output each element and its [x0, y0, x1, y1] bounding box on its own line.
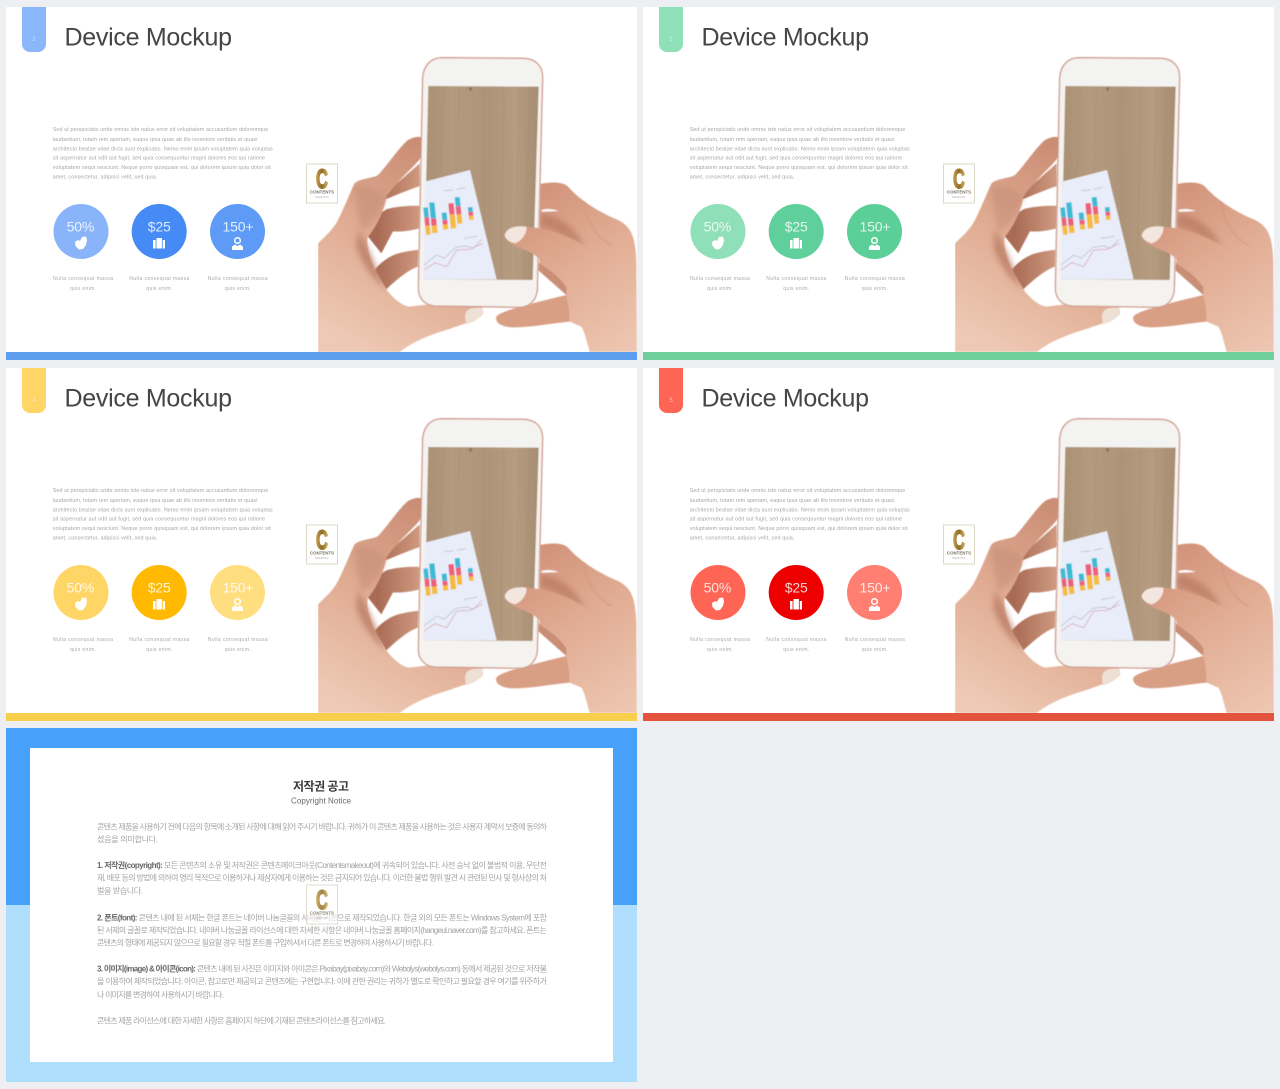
copyright white card [30, 748, 613, 1062]
slide 4 body text: sit aspernatur aut odit aut fugit, sed quia consequuntur magni dolores eos qui ratione [53, 517, 265, 523]
slide 5 stat: $25 [769, 565, 824, 620]
copyright clause 3: 나 이미지를 변경하여 사용하시기 바랍니다. [97, 989, 224, 999]
slide 4 logo stamp: CONTENTS [310, 550, 334, 556]
slide 5 stat: 150+: 150+ [860, 580, 890, 596]
slide 5 stat: 150+ [847, 565, 902, 620]
slide 4 logo stamp: C [316, 525, 328, 555]
slide 3 title: Device Mockup [702, 24, 869, 52]
slide 2 number tab [22, 7, 46, 52]
slide 4 stat captions: Nulla consequat massa [129, 637, 189, 643]
slide 2 bottom bar [6, 352, 637, 360]
slide 2 logo stamp: C [316, 164, 328, 194]
slide 2 body text [53, 127, 273, 181]
slide 5 stat captions: quis enim. [783, 647, 809, 653]
slide 5: red device mockup [643, 368, 1274, 721]
slide 2 stat captions: quis enim. [225, 286, 251, 292]
slide 2: blue device mockup [6, 7, 637, 360]
slide 5 number tab [659, 368, 683, 413]
slide 2 stat captions: Nulla consequat massa [208, 276, 268, 282]
slide 4 stat captions: quis enim. [70, 647, 96, 653]
copyright clause 2 [97, 912, 548, 948]
copyright logo stamp: MAKE OUT [315, 916, 329, 920]
copyright closing line: 콘텐츠 제품 라이선스에 대한 자세한 사항은 홈페이지 하단에 기재된 콘텐츠라이선스를 참고하세요. [97, 1016, 386, 1026]
copyright clause 1 [97, 860, 547, 896]
slide 4 body text: laudantium, totam rem aperiam, eaque ipsa quae ab illo inventore veritatis et quasi [53, 498, 257, 504]
slide 5 body text [690, 488, 910, 542]
slide 2 number tab: 2 [32, 37, 36, 43]
slide 4 body text: voluptatem sequi nesciunt. Neque porro quisquam est, qui dolorem ipsum quia dolor sit [53, 526, 271, 532]
slide 2 stat: $25 [132, 204, 187, 259]
copyright frame: lower light blue band [6, 905, 637, 1082]
slide 5 body text: Sed ut perspiciatis unde omnis iste natus error sit voluptatem accusantium doloremque [690, 488, 905, 494]
slide 2 body text: laudantium, totam rem aperiam, eaque ipsa quae ab illo inventore veritatis et quasi [53, 137, 257, 143]
slide 3 photo: hands holding phone [955, 58, 1274, 352]
copyright frame: upper blue band [6, 728, 637, 905]
slide 4 logo stamp [306, 525, 338, 564]
slide 2 photo: hands holding phone [318, 58, 637, 352]
copyright clause 1: 1. 저작권(copyright): 모든 콘텐츠의 소유 및 저작권은 콘텐츠메이크아웃(Contentsmakeout)에 귀속되어 있습니다. 사전 승낙 없이 불법적 이용, 무단전 [97, 860, 547, 870]
slide 3 logo stamp: C [953, 164, 965, 194]
slide 5 stat: 50%: 50% [704, 580, 731, 596]
copyright notice slide [6, 728, 637, 1082]
slide 5 stat captions: Nulla consequat massa [690, 637, 750, 643]
slide 5 stat captions: quis enim. [862, 647, 888, 653]
slide 4 bottom bar [6, 713, 637, 721]
copyright heading: 저작권 공고 [293, 778, 349, 794]
copyright intro text [97, 822, 548, 844]
slide 5 bottom bar [643, 713, 1274, 721]
slide 2 stat captions: quis enim. [70, 286, 96, 292]
copyright logo stamp: CONTENTS [310, 910, 334, 916]
slide 5 body text: sit aspernatur aut odit aut fugit, sed quia consequuntur magni dolores eos qui ratione [690, 517, 902, 523]
slide 2 body text: Sed ut perspiciatis unde omnis iste natus error sit voluptatem accusantium doloremque [53, 127, 268, 133]
slide 4 title: Device Mockup [64, 384, 232, 412]
copyright intro text: 셨음을 의미합니다. [97, 834, 158, 844]
slide 2 stat captions [53, 276, 268, 292]
slide 5 stat: 50% [690, 565, 746, 620]
copyright logo stamp [306, 885, 338, 924]
slide 2 logo stamp: MAKE OUT [315, 195, 329, 199]
copyright clause 1: 재, 배포 등의 방법에 의하여 영리 목적으로 이용하거나 제삼자에게 이용하는 것은 금지되어 있습니다. 이러한 불법 행위 발견 시 관련된 민사 및 형사상의 처 [97, 873, 547, 883]
slide 3 body text: Sed ut perspiciatis unde omnis iste natus error sit voluptatem accusantium doloremque [690, 127, 905, 133]
slide 3 body text: laudantium, totam rem aperiam, eaque ipsa quae ab illo inventore veritatis et quasi [690, 137, 894, 143]
slide 3 logo stamp: CONTENTS [947, 190, 971, 194]
slide 2 stat: 50%: 50% [67, 218, 94, 234]
slide 5 logo stamp: C [953, 525, 965, 555]
slide 3 stat captions: quis enim. [862, 286, 888, 292]
slide 4 photo: hands holding phone [318, 419, 637, 713]
slide 2 stat: 50% [54, 204, 108, 259]
slide 3 body text: voluptatem sequi nesciunt. Neque porro quisquam est, qui dolorem ipsum quia dolor sit [690, 165, 908, 171]
slide 4 stat captions: Nulla consequat massa [208, 637, 268, 643]
slide 5 body text: voluptatem sequi nesciunt. Neque porro quisquam est, qui dolorem ipsum quia dolor sit [690, 526, 908, 532]
slide 4 stat captions: quis enim. [146, 647, 172, 653]
slide 4 stat: 150+: 150+ [222, 580, 254, 596]
slide 2 logo stamp: CONTENTS [310, 190, 334, 194]
slide 3 bottom bar [643, 352, 1274, 360]
slide 2 logo stamp [306, 164, 338, 203]
copyright clause 2: 된 서체의 글꼴로 제작되었습니다. 네이버 나눔글꼴 라이선스에 대한 자세한 사항은 네이버 나눔글꼴 홈페이지(hangeul.naver.com)를 참고하세요. 폰트는 [97, 925, 547, 935]
copyright clause 2: 콘텐츠의 형태에 제공되지 않으므로 필요할 경우 적절 폰트를 구입하셔서 다른 폰트로 변경하여 사용하시기 바랍니다. [97, 938, 434, 948]
slide 5 body text: amet, consectetur, adipisci velit, sed quia. [690, 536, 794, 542]
copyright logo stamp: C [316, 885, 328, 915]
slide 3 stat captions [690, 276, 905, 292]
slide 4 body text [53, 488, 273, 542]
slide 4 body text: Sed ut perspiciatis unde omnis iste natus error sit voluptatem accusantium doloremque [53, 488, 268, 494]
slide 2 stat captions: quis enim. [146, 286, 172, 292]
slide 4 stat: 50%: 50% [67, 580, 94, 596]
slide 5 logo stamp: CONTENTS [947, 550, 971, 556]
slide 3 stat: $25 [769, 204, 824, 259]
copyright clause 3: 3. 이미지(image) & 아이콘(icon): 콘텐츠 내에 된 사진은 이미지와 아이콘은 Pixabay(pixabay.com)와 Webolys(webolys.com) 등에서 제공된 것으로 저작물 [97, 963, 547, 973]
slide 3 logo stamp [944, 164, 974, 203]
slide 4 stat: 50% [54, 565, 108, 620]
slide 5 logo stamp [944, 525, 974, 564]
slide 2 panel [6, 7, 637, 352]
slide 4 panel [6, 368, 637, 713]
slide 3 stat captions: Nulla consequat massa [690, 276, 750, 282]
slide 2 body text: voluptatem sequi nesciunt. Neque porro quisquam est, qui dolorem ipsum quia dolor sit [53, 165, 271, 171]
slide 3 stat: 50% [690, 204, 746, 259]
slide 5 photo: hands holding phone [955, 419, 1274, 713]
slide 3 stat: $25: $25 [785, 218, 808, 234]
slide 3 stat: 150+: 150+ [860, 218, 890, 234]
slide 4: yellow device mockup [6, 368, 637, 721]
slide 5 stat captions: Nulla consequat massa [845, 637, 905, 643]
slide 4 body text: amet, consectetur, adipisci velit, sed quia. [53, 536, 157, 542]
slide 3 body text: sit aspernatur aut odit aut fugit, sed quia consequuntur magni dolores eos qui ratione [690, 156, 902, 162]
slide 3: green device mockup [643, 7, 1274, 360]
copyright clause 1: 벌을 받습니다. [97, 886, 143, 896]
slide 2 stat captions: Nulla consequat massa [129, 276, 189, 282]
slide 5 title: Device Mockup [702, 384, 869, 412]
copyright clause 2: 2. 폰트(font): 콘텐츠 내에 된 서체는 한글 폰트는 네이버 나눔글꼴의 서체를 기본으로 제작되었습니다. 한글 외의 모든 폰트는 Windows System에 포함 [97, 912, 548, 922]
copyright clause 3: 을 이용하여 제작되었습니다. 아이콘, 참고로만 제공되고 콘텐츠에는 구현합니다. 이에 관한 권리는 귀하가 별도로 확인하고 필요할 경우 여기를 위주하거 [97, 976, 547, 986]
slide 5 stat: $25: $25 [785, 580, 808, 596]
slide 3 number tab [659, 7, 683, 52]
slide 5 stat captions: Nulla consequat massa [766, 637, 826, 643]
copyright clause 3 [97, 963, 547, 999]
slide 3 body text [690, 127, 910, 181]
slide 5 stat captions: quis enim. [707, 647, 733, 653]
slide 2 body text: architecto beatae vitae dicta sunt explicabo. Nemo enim ipsam voluptatem quia voluptas [53, 146, 273, 152]
slide 2 stat: 150+ [210, 204, 265, 259]
slide 2 stat: $25: $25 [148, 218, 171, 234]
slide 3 stat captions: quis enim. [783, 286, 809, 292]
slide 3 stat captions: Nulla consequat massa [766, 276, 826, 282]
slide 3 stat: 150+ [847, 204, 902, 259]
slide 5 panel [643, 368, 1274, 713]
copyright intro text: 콘텐츠 제품을 사용하기 전에 다음의 항목에 소개된 사항에 대해 읽어 주시기 바랍니다. 귀하가 이 콘텐츠 제품을 사용하는 것은 사용자 계약서 보증에 동의하 [97, 822, 548, 832]
slide 2 body text: amet, consectetur, adipisci velit, sed quia. [53, 175, 157, 181]
slide 2 title: Device Mockup [64, 24, 232, 52]
slide 3 stat: 50%: 50% [704, 218, 731, 234]
slide 5 body text: architecto beatae vitae dicta sunt explicabo. Nemo enim ipsam voluptatem quia voluptas [690, 507, 910, 513]
slide 4 stat: 150+ [210, 565, 265, 620]
slide 4 stat captions: Nulla consequat massa [53, 637, 113, 643]
slide 4 stat captions: quis enim. [225, 647, 251, 653]
slide 4 stat captions [53, 637, 268, 653]
slide 3 logo stamp: MAKE OUT [952, 195, 966, 199]
slide 2 body text: sit aspernatur aut odit aut fugit, sed quia consequuntur magni dolores eos qui ratione [53, 156, 265, 162]
slide 4 stat: $25 [132, 565, 187, 620]
slide 3 panel [643, 7, 1274, 352]
slide 3 stat captions: Nulla consequat massa [845, 276, 905, 282]
slide 5 number tab: 5 [669, 398, 673, 404]
slide 3 body text: amet, consectetur, adipisci velit, sed quia. [690, 175, 794, 181]
slide 4 stat: $25: $25 [148, 580, 171, 596]
slide 4 number tab [22, 368, 46, 413]
slide 4 number tab: 4 [32, 398, 36, 404]
slide 3 stat captions: quis enim. [707, 286, 733, 292]
slide 2 stat captions: Nulla consequat massa [53, 276, 113, 282]
slide 3 number tab: 3 [669, 37, 673, 43]
slide 4 logo stamp: MAKE OUT [315, 556, 329, 560]
slide 4 body text: architecto beatae vitae dicta sunt explicabo. Nemo enim ipsam voluptatem quia voluptas [53, 507, 273, 513]
slide 3 body text: architecto beatae vitae dicta sunt explicabo. Nemo enim ipsam voluptatem quia voluptas [690, 146, 910, 152]
slide 5 body text: laudantium, totam rem aperiam, eaque ipsa quae ab illo inventore veritatis et quasi [690, 498, 894, 504]
slide 5 logo stamp: MAKE OUT [952, 556, 966, 560]
slide 2 stat: 150+: 150+ [222, 218, 254, 234]
copyright subheading: Copyright Notice [291, 796, 352, 806]
slide 5 stat captions [690, 637, 905, 653]
